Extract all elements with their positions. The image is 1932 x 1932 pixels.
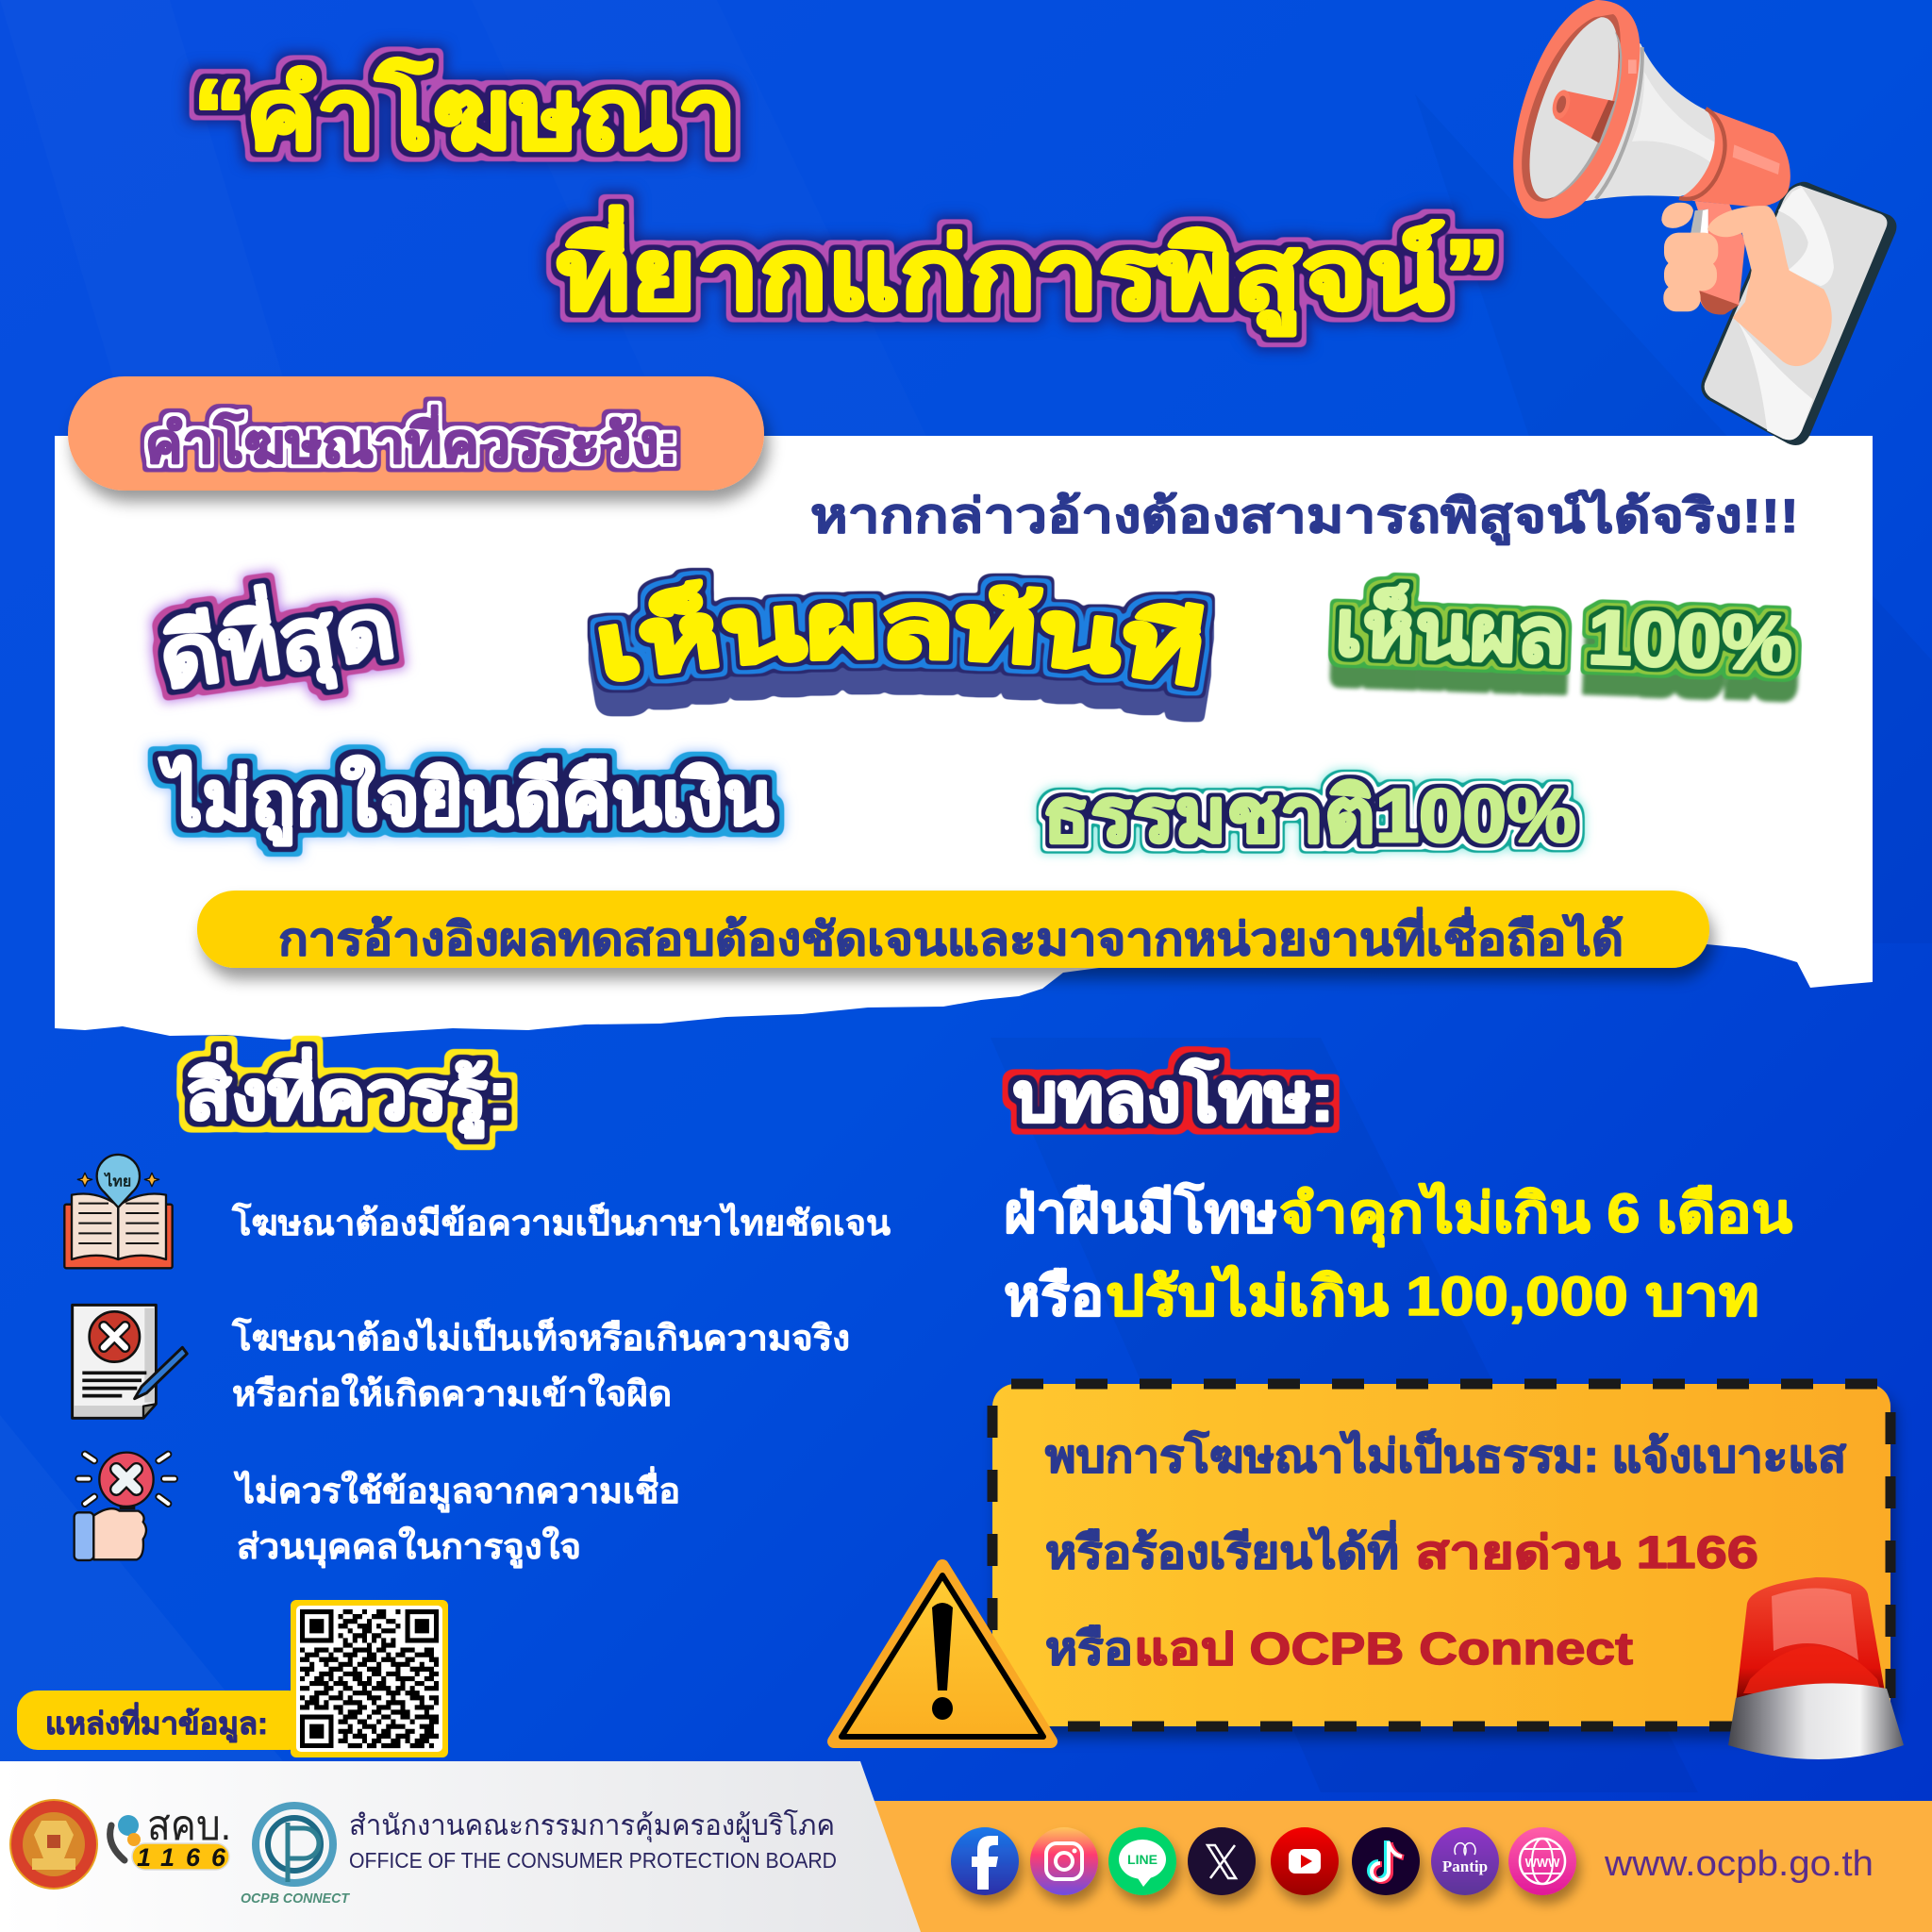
- sticker: instant results: เห็นผลทันที: [587, 568, 1215, 723]
- penalty text: จำคุกไม่เกิน 6 เดือน: [1279, 1182, 1792, 1248]
- banner text: การอ้างอิงผลทดสอบต้องชัดเจนและมาจากหน่วยงานที่เชื่อถือได้: [278, 907, 1624, 965]
- icon: website: [1508, 1827, 1576, 1895]
- icon: warning triangle: [834, 1566, 1051, 1741]
- icon: Thai book: ไทย: [103, 1172, 131, 1190]
- list text 3: [233, 1466, 680, 1569]
- website address: www.ocpb.go.th: [1604, 1844, 1874, 1884]
- sticker: best: ดีที่สุด: [152, 567, 401, 712]
- hotline abbreviation: สคบ.: [147, 1803, 231, 1849]
- logo: hotline 1166: [110, 1803, 231, 1872]
- icon: megaphone and phone: [1513, 0, 1896, 445]
- banner: test references: [197, 891, 1709, 968]
- pill heading text: คำโฆษณาที่ควรระวัง:: [145, 405, 677, 475]
- list text 2: [231, 1316, 850, 1413]
- sticker: 100 percent results: เห็นผล 100%: [1334, 581, 1794, 688]
- title line 1: “คำโฆษณา: [193, 58, 737, 170]
- icon: pantip: [1431, 1827, 1499, 1895]
- icon: line: LINE: [1127, 1852, 1158, 1867]
- source label: [17, 1690, 309, 1750]
- icon: red beacon: [1728, 1577, 1904, 1759]
- icon: rejected document: [73, 1305, 187, 1418]
- list text 1: โฆษณาต้องมีข้อความเป็นภาษาไทยชัดเจน: [231, 1201, 891, 1242]
- logo: government seal: [10, 1800, 97, 1889]
- organisation name: [349, 1808, 837, 1873]
- list text 3: ส่วนบุคคลในการจูงใจ: [237, 1525, 581, 1569]
- list text 2: หรือก่อให้เกิดความเข้าใจผิด: [232, 1373, 672, 1413]
- report text line 3: แอป OCPB Connect: [1134, 1624, 1633, 1674]
- penalty text: ฝ่าฝืนมีโทษ: [1004, 1180, 1277, 1244]
- footer: orange band: [870, 1801, 1932, 1932]
- organisation name: OFFICE OF THE CONSUMER PROTECTION BOARD: [349, 1848, 837, 1873]
- icon: instagram: [1030, 1827, 1098, 1895]
- pill: warning words heading: [68, 376, 764, 491]
- title: [193, 58, 1500, 336]
- icon: youtube: [1271, 1827, 1339, 1895]
- icon: website: WWW: [1525, 1856, 1560, 1870]
- social icons: [951, 1827, 1576, 1895]
- penalty text: หรือ: [1004, 1266, 1104, 1327]
- sticker: 100 percent natural: ธรรมชาติ100%: [1042, 774, 1576, 858]
- hotline number: 1166: [137, 1843, 226, 1872]
- yellow report box: [992, 1384, 1890, 1726]
- icon: hand with cross sign: [75, 1453, 175, 1560]
- logo: OCPB Connect: [241, 1806, 351, 1907]
- white torn panel: [55, 436, 1873, 1040]
- report text line 1: พบการโฆษณาไม่เป็นธรรม: แจ้งเบาะแส: [1045, 1428, 1847, 1482]
- icon: tiktok: [1352, 1827, 1420, 1895]
- organisation name: สำนักงานคณะกรรมการคุ้มครองผู้บริโภค: [349, 1808, 835, 1843]
- report text line 3: หรือ: [1045, 1624, 1133, 1674]
- icon: facebook: [951, 1827, 1019, 1895]
- logo caption: OCPB CONNECT: [241, 1890, 351, 1907]
- heading: things to know: สิ่งที่ควรรู้:: [186, 1047, 512, 1139]
- footer: grey panel: [0, 1761, 921, 1932]
- penalty text: ปรับไม่เกิน 100,000 บาท: [1106, 1265, 1759, 1327]
- list text 3: ไม่ควรใช้ข้อมูลจากความเชื่อ: [233, 1466, 680, 1513]
- icon: X: [1188, 1827, 1256, 1895]
- source text: แหล่งที่มาข้อมูล:: [45, 1702, 268, 1743]
- list text 2: โฆษณาต้องไม่เป็นเท็จหรือเกินความจริง: [231, 1316, 850, 1357]
- icon: line: [1108, 1827, 1176, 1895]
- QR code: [291, 1600, 448, 1757]
- title line 2: ที่ยากแก่การพิสูจน์”: [557, 206, 1500, 336]
- sticker: money back: ไม่ถูกใจยินดีคืนเงิน: [158, 755, 774, 846]
- report text line 2: [1045, 1520, 1758, 1578]
- icon: Thai book: [64, 1155, 173, 1268]
- icon: pantip: Pantip: [1442, 1857, 1488, 1875]
- penalty text: [1004, 1180, 1792, 1327]
- report text line 2: หรือร้องเรียนได้ที่: [1045, 1520, 1399, 1578]
- heading: penalty: บทลงโทษ:: [1013, 1057, 1334, 1136]
- callout text: must be provable: หากกล่าวอ้างต้องสามารถพิสูจน์ได้จริง!!!: [810, 489, 1799, 545]
- report text line 2: สายด่วน 1166: [1415, 1528, 1758, 1578]
